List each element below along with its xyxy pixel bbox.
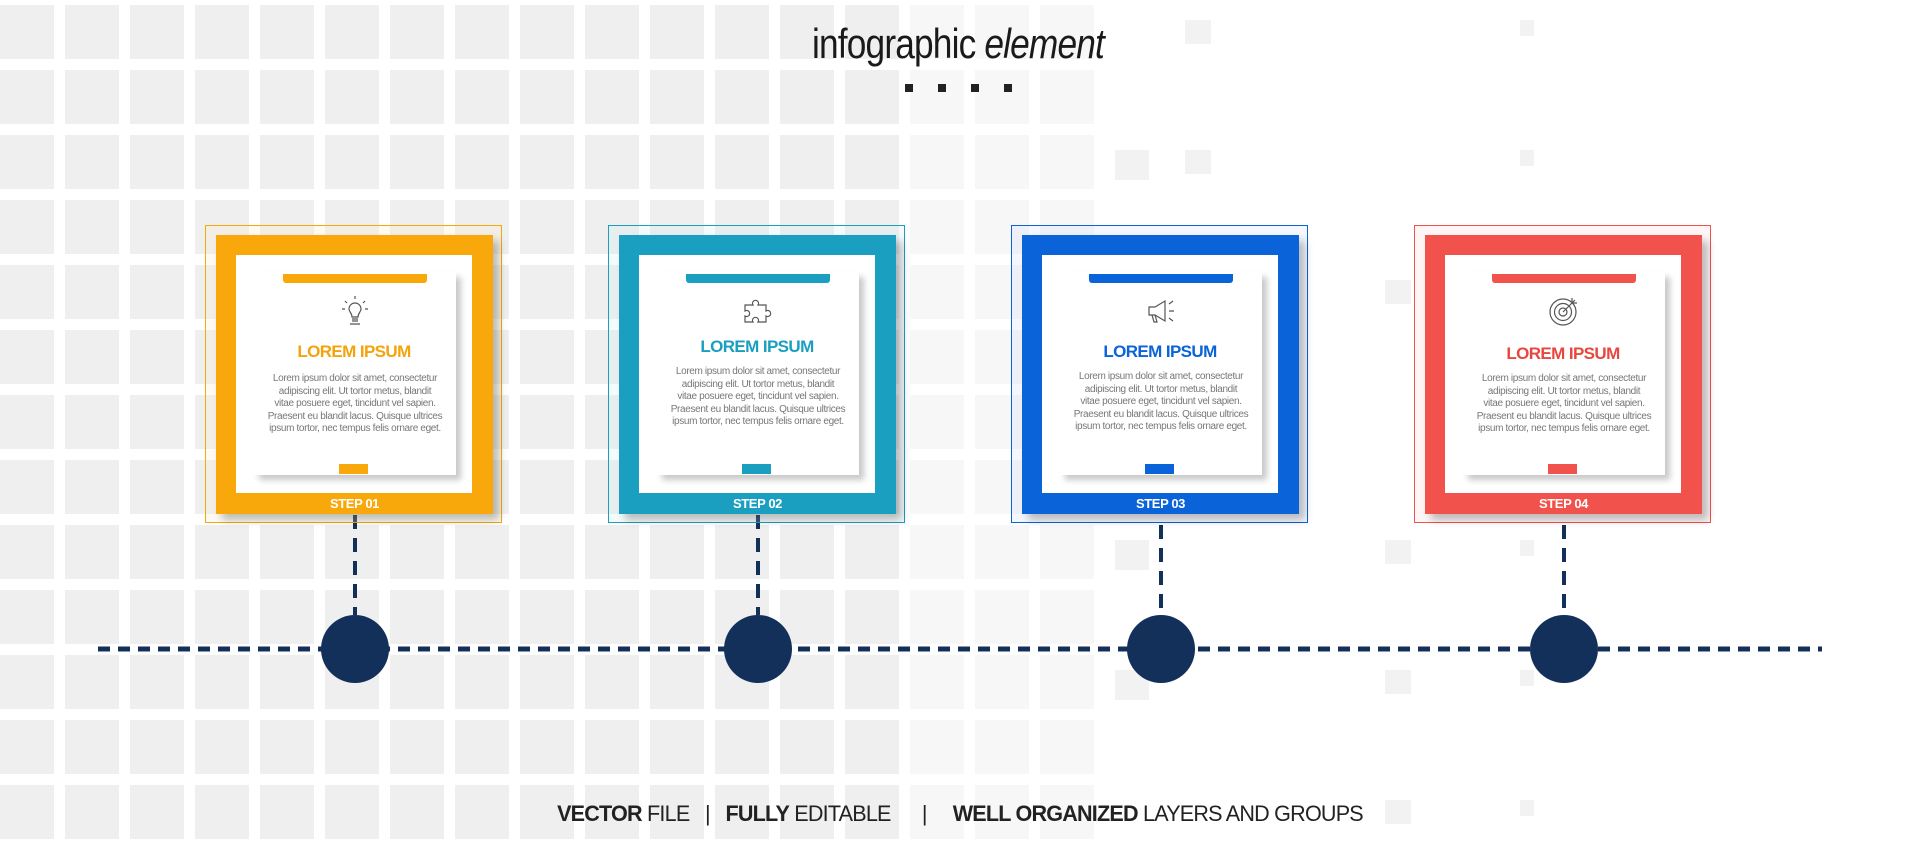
card: step 03: vitae posuere eget, tincidunt vel sapien. bbox=[1080, 396, 1242, 407]
card: step 02: Lorem ipsum dolor sit amet, consectetur bbox=[676, 366, 840, 377]
card: step 01 bbox=[205, 225, 504, 524]
card: step 02: adipiscing elit. Ut tortor metus, blandit bbox=[682, 379, 834, 390]
card: step 02 bbox=[608, 225, 906, 524]
card: step 03: LOREM IPSUM bbox=[1103, 342, 1217, 361]
icon: puzzle bbox=[744, 300, 772, 323]
card: step 01: Praesent eu blandit lacus. Quisque ultrices bbox=[268, 411, 442, 422]
card: step 03: Praesent eu blandit lacus. Quisque ultrices bbox=[1074, 409, 1248, 420]
card: step 02: Praesent eu blandit lacus. Quisque ultrices bbox=[671, 404, 845, 415]
card: step 01: vitae posuere eget, tincidunt vel sapien. bbox=[274, 398, 436, 409]
card: step 03: adipiscing elit. Ut tortor metus, blandit bbox=[1085, 384, 1237, 395]
card: step 02: LOREM IPSUM bbox=[700, 337, 814, 356]
card: step 02: ipsum tortor, nec tempus felis ornare eget. bbox=[672, 416, 844, 427]
title: infographic element bbox=[812, 20, 1104, 67]
card: step 04: STEP 04 bbox=[1539, 496, 1588, 511]
card: step 03 bbox=[1011, 225, 1310, 524]
card: step 04: LOREM IPSUM bbox=[1506, 344, 1620, 363]
icon: megaphone bbox=[1148, 300, 1174, 323]
card: step 04: Praesent eu blandit lacus. Quisque ultrices bbox=[1477, 411, 1651, 422]
card: step 01: LOREM IPSUM bbox=[297, 342, 411, 361]
card: step 01: STEP 01 bbox=[330, 496, 379, 511]
card: step 04: adipiscing elit. Ut tortor metus, blandit bbox=[1488, 386, 1640, 397]
background grid bbox=[0, 5, 1534, 839]
card: step 01: Lorem ipsum dolor sit amet, consectetur bbox=[273, 373, 437, 384]
icon: target bbox=[1549, 298, 1577, 326]
card: step 04: Lorem ipsum dolor sit amet, consectetur bbox=[1482, 373, 1646, 384]
card: step 03: Lorem ipsum dolor sit amet, consectetur bbox=[1079, 371, 1243, 382]
footer: VECTOR FILE | FULLY EDITABLE | WELL ORGANIZED LAYERS AND GROUPS bbox=[557, 801, 1363, 826]
card: step 02: STEP 02 bbox=[733, 496, 782, 511]
icon: bulb bbox=[342, 296, 368, 325]
card: step 04 bbox=[1414, 225, 1712, 524]
title dots bbox=[905, 84, 1012, 92]
card: step 03: ipsum tortor, nec tempus felis ornare eget. bbox=[1075, 421, 1247, 432]
card: step 04: ipsum tortor, nec tempus felis ornare eget. bbox=[1478, 423, 1650, 434]
card: step 03: STEP 03 bbox=[1136, 496, 1185, 511]
card: step 01: adipiscing elit. Ut tortor metus, blandit bbox=[279, 386, 431, 397]
card: step 04: vitae posuere eget, tincidunt vel sapien. bbox=[1483, 398, 1645, 409]
card: step 01: ipsum tortor, nec tempus felis ornare eget. bbox=[269, 423, 441, 434]
card: step 02: vitae posuere eget, tincidunt vel sapien. bbox=[677, 391, 839, 402]
